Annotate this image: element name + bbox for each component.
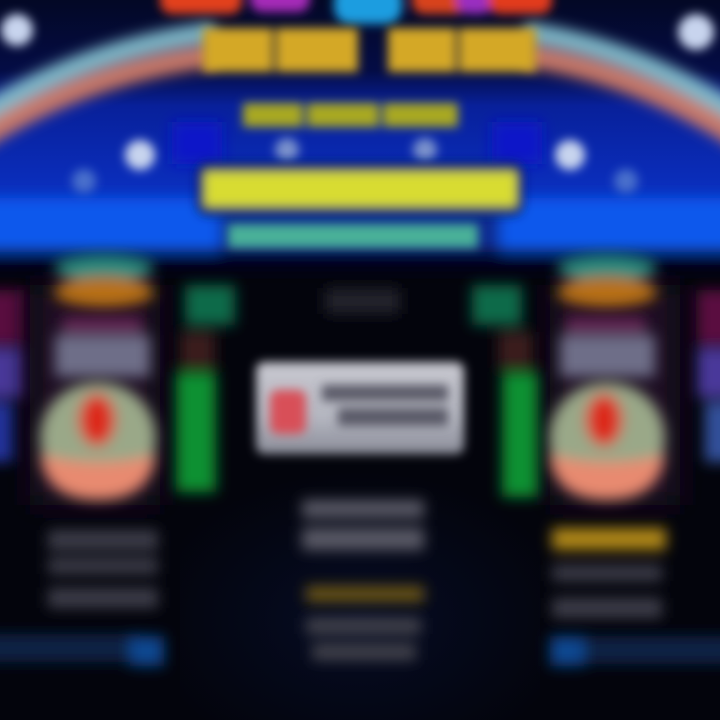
center panel — [256, 362, 464, 454]
center top dark label — [325, 288, 400, 314]
center text block — [302, 500, 424, 550]
reels — [55, 318, 150, 377]
panel red icon — [270, 390, 306, 434]
rainbow arcs — [0, 32, 720, 146]
machine frame — [30, 285, 160, 505]
wheel — [40, 382, 156, 500]
wheel — [549, 382, 665, 500]
machine frame — [550, 285, 680, 505]
right side column — [696, 290, 720, 462]
left text block — [48, 530, 158, 608]
top balloons — [160, 0, 552, 24]
center lower text — [306, 618, 421, 660]
blue banner band — [0, 198, 720, 272]
stars — [1, 14, 714, 193]
title — [203, 28, 536, 72]
left slot machine — [0, 255, 160, 505]
green pillars — [176, 285, 538, 497]
machine topper — [54, 255, 154, 307]
reels — [560, 318, 655, 377]
left side column — [0, 290, 24, 462]
left blue bar — [0, 634, 164, 666]
machine topper — [557, 255, 657, 307]
right blue bar — [550, 636, 720, 666]
deep blue star shapes — [172, 122, 542, 164]
subtitle — [243, 103, 458, 127]
right slot machine — [549, 255, 720, 505]
center yellow label — [306, 586, 424, 602]
panel text — [322, 385, 448, 426]
green subheading — [228, 224, 478, 248]
right text block — [552, 528, 666, 618]
main heading — [196, 162, 524, 216]
